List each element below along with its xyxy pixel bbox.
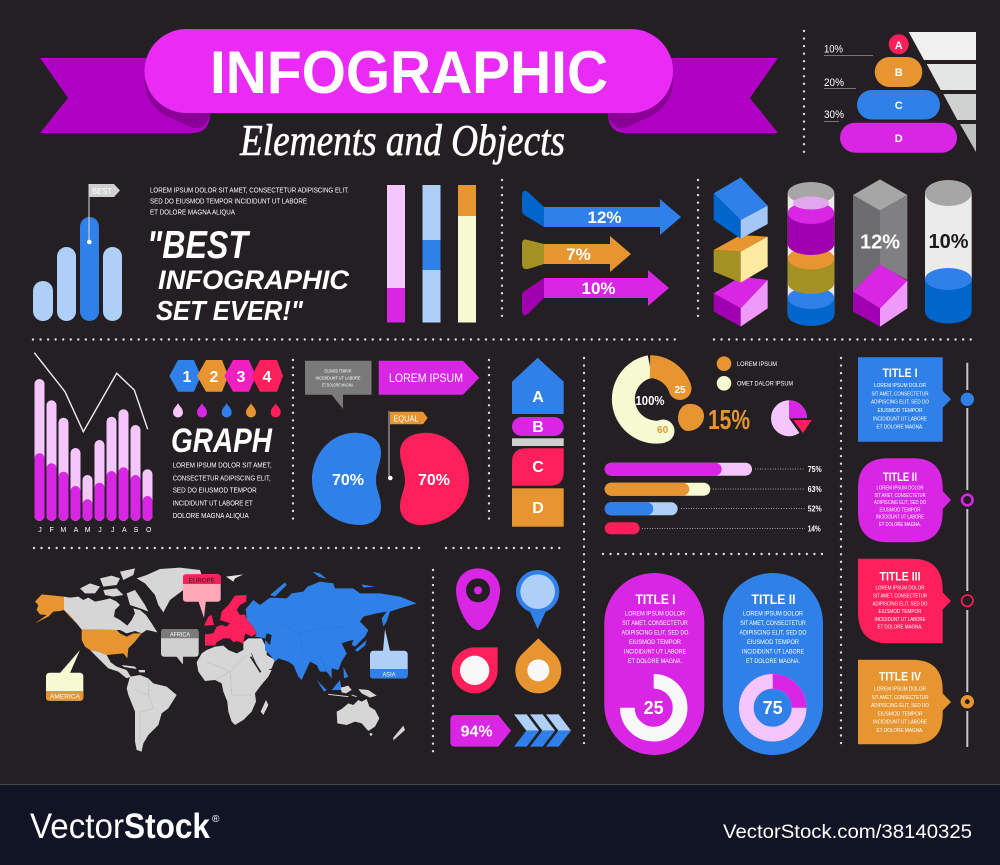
card: title II magenta: SIT AMET, CONSECTETUR <box>874 493 926 499</box>
pill card: title I magenta: 25 <box>644 698 664 718</box>
pyramid: D <box>895 133 903 145</box>
subtitle: Elements and Objects <box>239 116 565 165</box>
progress bars <box>605 463 822 534</box>
card: title II magenta <box>858 458 951 542</box>
pill card: title I magenta <box>604 573 704 755</box>
equal flag <box>388 411 428 480</box>
card: title II magenta: LOREM IPSUM DOLOR <box>876 486 924 492</box>
intro text: LOREM IPSUM DOLOR SIT AMET, CONSECTETUR ADIPISCING ELIT. <box>150 188 349 195</box>
intro text: SED DO EIUSMOD TEMPOR INCIDIDUNT UT LABORE <box>150 198 307 206</box>
card: title IV orange: SIT AMET, CONSECTETUR <box>872 695 929 701</box>
orange blob 15%: 15% <box>708 404 750 435</box>
arrow: 12%: 12% <box>587 208 622 227</box>
droplets <box>173 403 281 418</box>
stacked vertical bars <box>387 185 476 322</box>
pill card: title I magenta: TITLE I <box>636 591 676 607</box>
graph text: SED DO EIUSMOD TEMPOR <box>173 486 257 495</box>
monthly bar chart: M <box>60 527 66 534</box>
monthly bar chart: M <box>85 527 91 534</box>
isometric cube stack <box>714 177 768 327</box>
footer bar <box>0 784 1000 865</box>
monthly bar chart: F <box>50 527 54 534</box>
card: title IV orange: EIUSMOD TEMPOR <box>878 711 923 717</box>
bar chart: best <box>33 184 122 321</box>
map callout: Africa <box>161 629 199 664</box>
pill card: title II blue: SIT AMET, CONSECTETUR <box>740 620 806 627</box>
lorem ipsum tag <box>379 361 479 395</box>
card: title IV orange: LOREM IPSUM DOLOR <box>874 686 926 692</box>
pill card: title II blue: LOREM IPSUM DOLOR <box>743 610 803 618</box>
card: title III red: ADIPISCING ELIT, SED DO <box>872 601 928 607</box>
graph text: CONSECTETUR ADIPISCING ELIT, <box>173 473 271 482</box>
quote: "BEST <box>147 224 251 267</box>
americas and greenland <box>35 568 202 752</box>
card: title IV orange: ET DOLORE MAGNA. <box>876 728 924 734</box>
card: title III red: LOREM IPSUM DOLOR <box>876 586 925 592</box>
card: title I blue: INCIDIDUNT UT LABORE <box>873 416 927 422</box>
numbered hexagons: 1 <box>183 369 192 386</box>
arrow: 7% <box>522 236 631 272</box>
card: title IV orange: ADIPISCING ELIT, SED DO <box>871 703 930 709</box>
timeline <box>961 363 974 747</box>
pill card: title I magenta: EIUSMOD TEMPOR <box>629 639 681 646</box>
monthly bar chart: S <box>134 527 139 534</box>
orange blob 15% <box>678 404 750 435</box>
card: title III red: ET DOLORE MAGNA. <box>878 625 922 631</box>
monthly bar chart: J <box>98 527 102 534</box>
card: title I blue: ADIPISCING ELIT, SED DO <box>871 400 930 406</box>
card: title III red: TITLE III <box>880 570 920 584</box>
card: title IV orange: TITLE IV <box>879 670 921 684</box>
title banner <box>40 29 778 133</box>
letter blocks A B C D: A <box>532 389 544 406</box>
monthly bar chart: A <box>122 527 127 534</box>
blob: red 70% <box>400 433 469 525</box>
box: 12%: 12% <box>860 231 900 253</box>
pyramid: A <box>895 40 903 52</box>
pill card: title I magenta: INCIDIDUNT UT LABORE <box>624 648 686 656</box>
pill card: title I magenta: ET DOLORE MAGNA. <box>628 658 682 665</box>
pill card: title II blue: ADIPISCING ELIT, SED DO <box>740 630 807 636</box>
gray speech callout: INCIDIDUNT UT LABORE <box>316 376 360 380</box>
letter blocks A B C D <box>512 358 564 527</box>
card: title I blue: ET DOLORE MAGNA. <box>876 425 924 431</box>
arrow: 12% <box>522 191 681 235</box>
gray speech callout: ET DOLORE MAGNA. <box>322 382 354 388</box>
map callout: America <box>46 650 83 701</box>
card: title I blue: LOREM IPSUM DOLOR <box>874 383 926 389</box>
quote <box>147 224 350 326</box>
map callout: Africa: AFRICA <box>170 632 191 639</box>
card: title IV orange: INCIDIDUNT UT LABORE <box>873 720 927 726</box>
map callout: America: AMERICA <box>50 694 81 700</box>
gray speech callout: EIUSMOD TEMPOR <box>324 368 352 374</box>
numbered hexagons: 4 <box>263 369 272 386</box>
title banner: INFOGRAPHIC <box>210 39 608 106</box>
gray speech callout <box>305 361 372 409</box>
tag: 94% <box>450 715 511 747</box>
card: title III red: INCIDIDUNT UT LABORE <box>874 617 926 623</box>
letter blocks A B C D: B <box>532 419 544 436</box>
icon: chevrons <box>514 714 571 747</box>
intro text: ET DOLORE MAGNA ALIQUA <box>150 209 235 216</box>
card: title I blue <box>858 357 951 442</box>
graph heading: GRAPH <box>171 422 273 460</box>
donut chart 100% <box>623 367 692 442</box>
card: title II magenta: INCIDIDUNT UT LABORE <box>876 515 925 521</box>
arrow: 7%: 7% <box>566 245 591 264</box>
icon: orange drop <box>515 638 561 693</box>
card: title I blue: SIT AMET, CONSECTETUR <box>872 391 929 397</box>
map callout: Europe <box>183 574 221 618</box>
footer bar: Stock <box>124 807 210 846</box>
letter blocks A B C D: C <box>532 459 544 476</box>
donut chart 100%: 100% <box>636 393 665 408</box>
cylinder stack <box>788 182 834 326</box>
graph text: INCIDIDUNT UT LABORE ET <box>173 498 253 507</box>
lorem ipsum tag: LOREM IPSUM <box>389 371 463 385</box>
icon: magenta pin <box>456 568 500 630</box>
numbered hexagons: 3 <box>237 369 246 386</box>
pill card: title II blue <box>723 573 823 755</box>
pyramid: 20% <box>824 77 844 89</box>
box: 12% <box>853 179 907 327</box>
blob: blue 70%: 70% <box>332 472 364 489</box>
pill card: title I magenta: LOREM IPSUM DOLOR <box>625 610 685 618</box>
pill card: title I magenta: SIT AMET, CONSECTETUR <box>622 620 688 627</box>
location pins <box>450 568 571 747</box>
arrow: 10%: 10% <box>581 279 616 298</box>
pyramid: 30% <box>824 109 844 121</box>
card: title III red: SIT AMET, CONSECTETUR <box>873 594 927 600</box>
pyramid: 10% <box>824 44 843 56</box>
card: title II magenta: ET DOLORE MAGNA. <box>879 522 921 528</box>
graph text: DOLORE MAGNA ALIQUA <box>173 511 249 520</box>
monthly bar chart: A <box>74 527 79 534</box>
pill card: title II blue: EIUSMOD TEMPOR <box>747 639 799 646</box>
pyramid: C <box>895 100 903 112</box>
blob: red 70%: 70% <box>418 472 450 489</box>
card: title III red: EIUSMOD TEMPOR <box>878 609 922 615</box>
numbered hexagons: 2 <box>210 369 219 386</box>
world map <box>35 568 417 752</box>
progress bars: 63% <box>808 485 822 494</box>
donut legend: OMET DALOR IPSUM <box>737 380 793 388</box>
bar chart: best: BEST <box>92 187 112 196</box>
icon: blue pin <box>516 570 559 629</box>
donut legend <box>717 356 793 391</box>
map callout: Europe: EUROPE <box>189 577 215 584</box>
progress bars: 75% <box>808 465 822 474</box>
blob: blue 70% <box>312 433 381 525</box>
pill card: title II blue: TITLE II <box>752 591 796 607</box>
footer bar: ® <box>212 814 220 825</box>
letter blocks A B C D: D <box>532 500 544 517</box>
equal flag: EQUAL <box>394 414 419 424</box>
card: title II magenta: TITLE II <box>883 472 917 484</box>
cylinder: 10%: 10% <box>928 231 969 253</box>
pill card: title II blue: INCIDIDUNT UT LABORE <box>742 648 804 656</box>
footer bar: VectorStock.com/38140325 <box>723 822 972 843</box>
pie chart <box>771 400 815 438</box>
numbered hexagons <box>169 360 283 392</box>
intro text <box>150 188 349 216</box>
card: title I blue: TITLE I <box>882 366 918 380</box>
arrow: 10% <box>522 270 669 315</box>
cylinder: 10% <box>925 180 972 324</box>
pyramid: B <box>895 67 903 79</box>
monthly bar chart: J <box>38 527 42 534</box>
graph text <box>173 461 272 520</box>
donut chart 100%: 60 <box>657 425 669 436</box>
old world <box>197 572 417 740</box>
pill card: title II blue: ET DOLORE MAGNA. <box>746 658 800 665</box>
monthly bar chart: J <box>111 527 114 534</box>
pyramid <box>824 32 976 153</box>
card: title III red <box>858 559 951 643</box>
footer bar: Vector <box>30 807 124 846</box>
progress bars: 14% <box>808 524 821 534</box>
quote: INFOGRAPHIC <box>158 265 350 295</box>
progress bars: 52% <box>808 504 822 514</box>
donut legend: LOREM IPSUM <box>737 361 777 368</box>
pill card: title II blue: 75 <box>763 698 783 718</box>
map callout: Asia: ASIA <box>382 672 396 678</box>
card: title IV orange <box>858 660 951 744</box>
map callout: Asia <box>370 629 408 678</box>
quote: SET EVER!" <box>156 295 304 326</box>
graph text: LOREM IPSUM DOLOR SIT AMET, <box>173 461 272 470</box>
pill card: title I magenta: ADIPISCING ELIT, SED DO <box>622 630 689 636</box>
tag: 94%: 94% <box>461 724 493 741</box>
monthly bar chart: O <box>146 527 152 534</box>
card: title II magenta: EIUSMOD TEMPOR <box>880 507 921 513</box>
card: title I blue: EIUSMOD TEMPOR <box>878 408 923 414</box>
card: title II magenta: ADIPISCING ELIT, SED DO <box>874 500 926 506</box>
donut chart 100%: 25 <box>674 385 686 396</box>
monthly bar chart <box>34 353 152 534</box>
icon: red marker <box>452 647 498 693</box>
